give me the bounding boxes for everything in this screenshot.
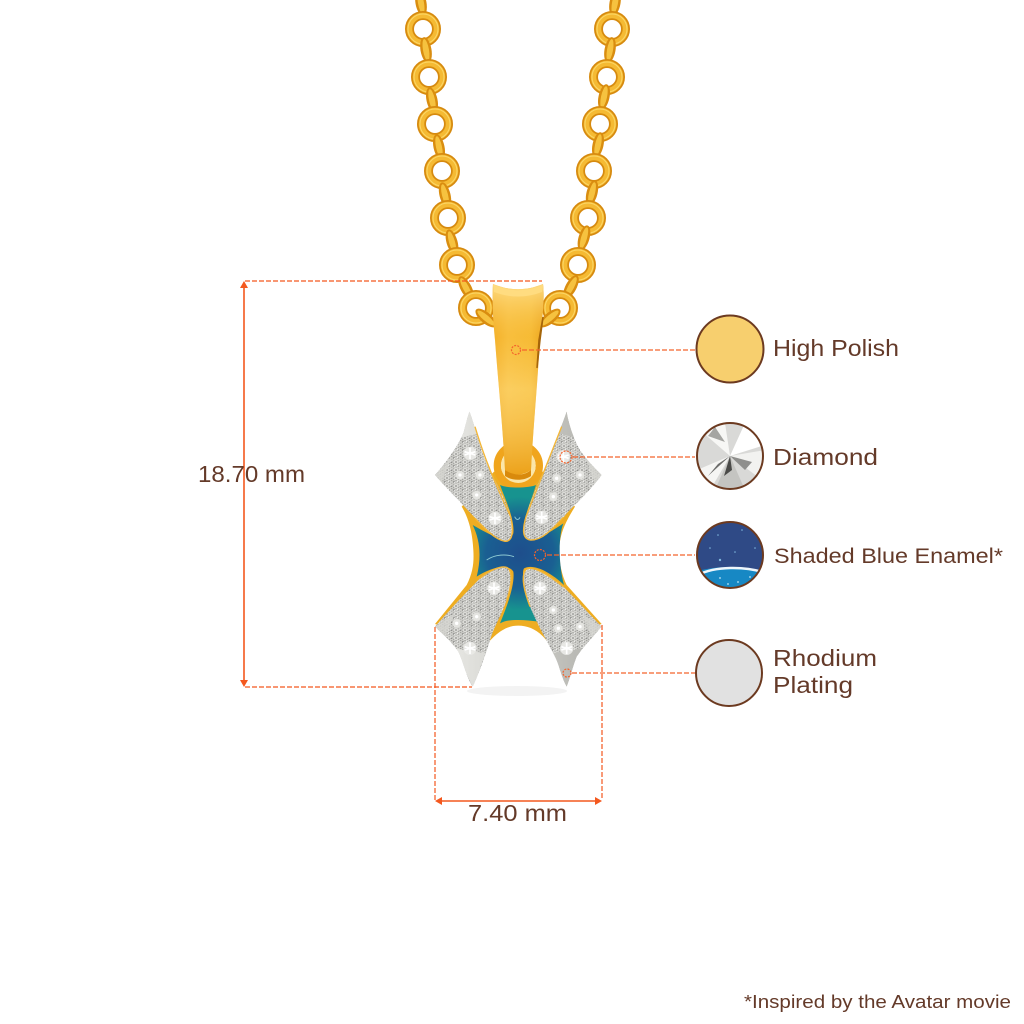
bail top highlight xyxy=(494,285,543,296)
swatch: rhodium xyxy=(696,640,762,706)
label: High Polish xyxy=(773,335,899,361)
bail light xyxy=(493,284,544,474)
bail front xyxy=(493,284,544,474)
bail loop base xyxy=(505,470,531,480)
callout: diamond xyxy=(560,423,878,490)
bail ring xyxy=(497,445,539,487)
width label: 7.40 mm xyxy=(468,800,567,826)
bail xyxy=(493,284,544,480)
callout: high polish xyxy=(512,316,899,382)
footnote: *Inspired by the Avatar movie xyxy=(744,992,1011,1012)
swatch: high polish xyxy=(696,316,764,382)
necklace chain xyxy=(408,0,627,331)
height label: 18.70 mm xyxy=(198,461,305,487)
silver tips xyxy=(455,410,582,688)
leader line xyxy=(512,346,695,354)
pendant shadow xyxy=(467,686,567,696)
bail shadow edge xyxy=(537,317,543,368)
height dimension xyxy=(240,281,542,687)
callout: rhodium plating xyxy=(563,640,877,706)
label: Rhodium xyxy=(773,645,877,671)
left chain strand xyxy=(408,0,499,331)
leader line xyxy=(534,550,695,560)
label xyxy=(773,645,877,698)
enamel cross xyxy=(473,485,564,623)
right chain strand xyxy=(537,0,627,331)
ring opening xyxy=(501,448,536,483)
gold frame xyxy=(435,472,602,641)
enamel highlight xyxy=(487,517,520,560)
swatch: diamond xyxy=(697,423,765,490)
arm gold rims xyxy=(475,427,563,607)
swatch: enamel xyxy=(696,521,764,589)
callout: shaded blue enamel xyxy=(534,522,1003,595)
diamond arms xyxy=(435,412,602,686)
label: Plating xyxy=(773,672,853,698)
label: Shaded Blue Enamel* xyxy=(774,545,1003,568)
leader line xyxy=(560,451,695,463)
width dimension xyxy=(435,625,602,805)
leader line xyxy=(563,669,695,677)
pendant xyxy=(435,412,602,686)
label: Diamond xyxy=(773,444,878,470)
